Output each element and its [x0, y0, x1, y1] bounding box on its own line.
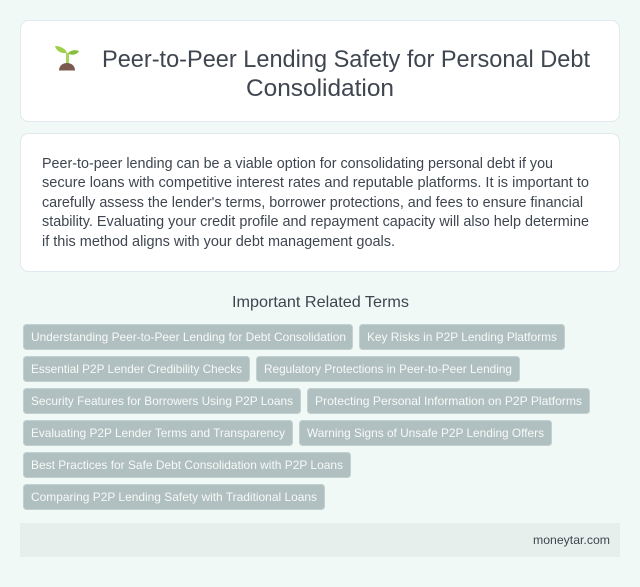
footer	[20, 523, 620, 557]
chip	[24, 484, 324, 510]
chip	[24, 452, 350, 478]
chip: Regulatory Protections in Peer-to-Peer Lending	[264, 362, 512, 376]
chip	[24, 388, 300, 414]
title: Consolidation	[246, 75, 394, 102]
chip: Warning Signs of Unsafe P2P Lending Offers	[307, 426, 544, 440]
chip: Best Practices for Safe Debt Consolidation with P2P Loans	[31, 458, 343, 472]
chip	[300, 420, 552, 446]
chip: Understanding Peer-to-Peer Lending for Debt Consolidation	[31, 330, 346, 344]
icon: seedling	[55, 46, 79, 70]
chip	[360, 324, 564, 350]
chip: Security Features for Borrowers Using P2P Loans	[31, 394, 293, 408]
chip	[24, 420, 292, 446]
summary text: if this method aligns with your debt management goals.	[42, 234, 395, 250]
title	[102, 46, 590, 102]
chip: Evaluating P2P Lender Terms and Transparency	[31, 426, 285, 440]
chip: Protecting Personal Information on P2P Platforms	[315, 394, 582, 408]
panel: summary card	[20, 134, 620, 272]
chip: Essential P2P Lender Credibility Checks	[31, 362, 242, 376]
chip: Comparing P2P Lending Safety with Traditional Loans	[31, 490, 317, 504]
heading: important related terms: Important Related Terms	[232, 294, 409, 311]
footer: moneytar.com	[533, 533, 610, 547]
summary text: secure loans with competitive interest rates and reputable platforms. It is important to	[42, 175, 589, 191]
panel: title card	[20, 20, 620, 122]
title: Peer-to-Peer Lending Safety for Personal Debt	[102, 46, 590, 73]
chip	[256, 356, 520, 382]
summary text: carefully assess the lender's terms, borrower protections, and fees to ensure financial	[42, 195, 583, 211]
chip	[24, 356, 250, 382]
chip	[24, 324, 352, 350]
summary text: stability. Evaluating your credit profile and repayment capacity will also help determine	[42, 214, 589, 230]
summary text: Peer-to-peer lending can be a viable option for consolidating personal debt if you	[42, 156, 553, 172]
summary text	[42, 156, 589, 250]
chip: Key Risks in P2P Lending Platforms	[367, 330, 557, 344]
chip	[308, 388, 590, 414]
panel: related term chips	[24, 324, 590, 510]
